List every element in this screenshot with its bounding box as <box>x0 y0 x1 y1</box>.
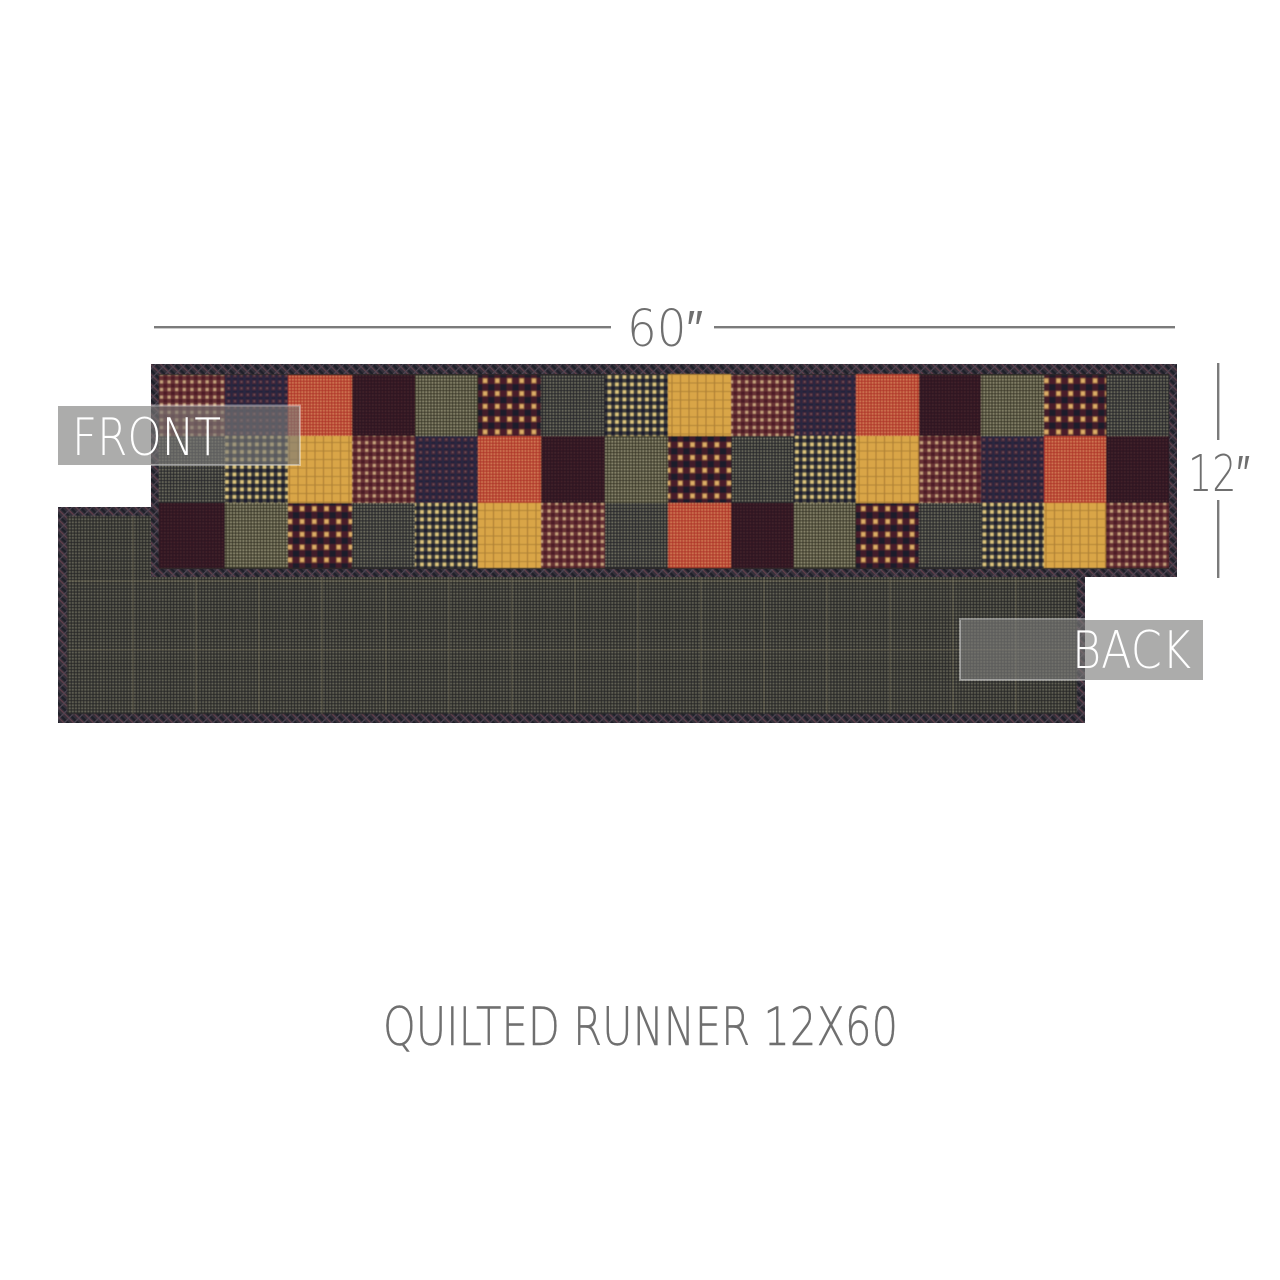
back binding border <box>58 507 1085 723</box>
patchwork grid <box>159 374 1169 568</box>
label: FRONT: FRONT <box>72 408 221 468</box>
quilted runner back side <box>58 507 1085 723</box>
patch row 1 <box>159 374 1169 436</box>
width dimension: 60 inches: 60″ <box>627 300 703 359</box>
patchwork underlay <box>159 374 1169 569</box>
front binding border <box>151 364 1177 577</box>
back woven field <box>67 516 1077 714</box>
quilted runner front side <box>151 364 1177 577</box>
patch row 3 <box>159 503 1169 568</box>
label: BACK <box>960 619 1203 681</box>
product title: QUILTED RUNNER 12X60 <box>383 997 898 1058</box>
back quilting stitch lines <box>67 516 1077 714</box>
label: BACK: BACK <box>1072 621 1191 681</box>
height dimension: 12 inches: 12″ <box>1188 445 1250 504</box>
patch row 2 <box>159 436 1169 503</box>
